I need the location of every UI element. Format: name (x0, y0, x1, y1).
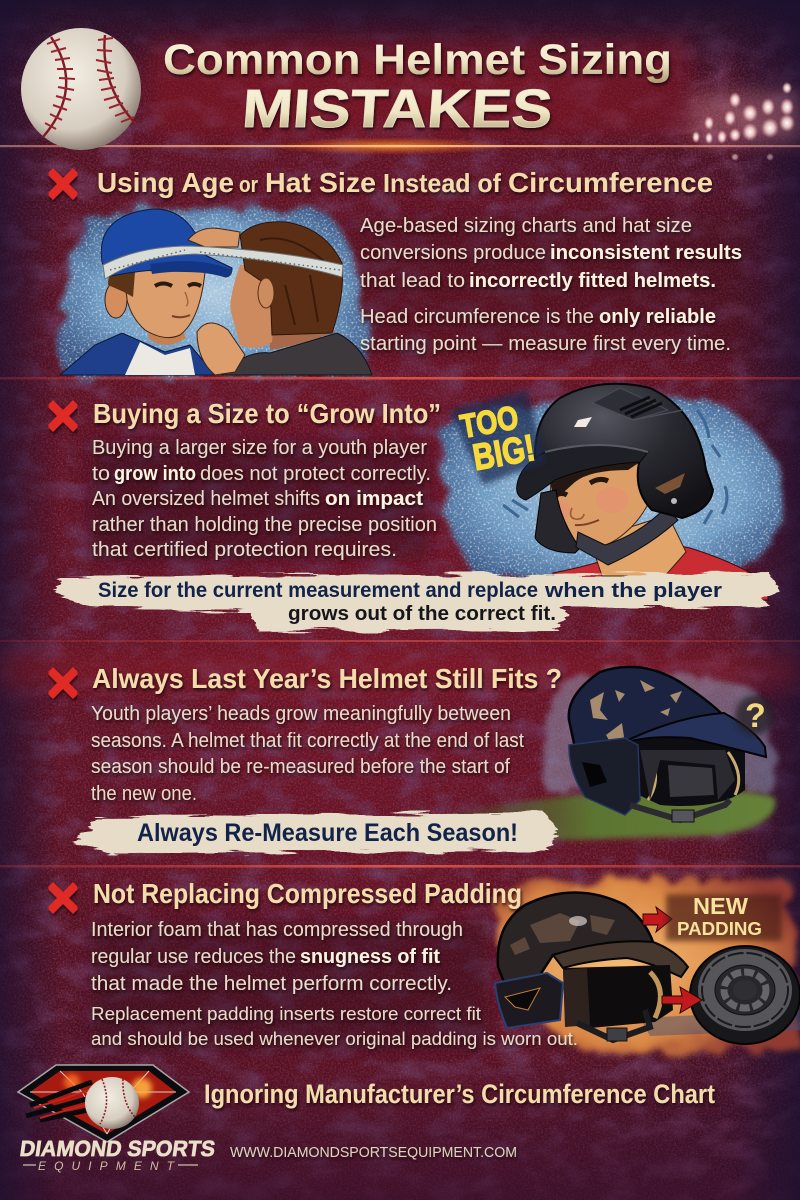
callout banner (72, 813, 558, 853)
stadium lights (690, 82, 800, 161)
body text: Interior foam that has compressed through (91, 919, 463, 941)
divider: mistake 3 (0, 865, 800, 868)
illustration: compressed padding (495, 878, 800, 1056)
website: WWW.DIAMONDSPORTSEQUIPMENT.COM (230, 1144, 517, 1161)
icon: question mark (735, 695, 775, 735)
icon: red x (50, 171, 76, 197)
title (163, 36, 672, 139)
callout banner: when the player (544, 580, 722, 602)
divider: mistake 1 (0, 377, 800, 380)
callout: too big (449, 389, 547, 489)
heading: Instead of (383, 168, 501, 198)
heading: Circumference (508, 167, 713, 198)
body text: Buying a larger size for a youth player (92, 437, 427, 459)
body text: regular use reduces the (91, 946, 296, 968)
body text (91, 703, 524, 805)
icon: red x (50, 885, 76, 911)
body text: that made the helmet perform correctly. (91, 973, 452, 995)
logo wordmark (18, 1136, 217, 1173)
callout: new padding: PADDING (677, 919, 762, 939)
logo wordmark: DIAMOND SPORTS (18, 1136, 217, 1161)
callout: too big: TOO (457, 398, 521, 445)
body text: that lead to (360, 270, 465, 292)
body text: Age-based sizing charts and hat size (360, 215, 692, 237)
body text: grow into (114, 463, 196, 485)
body text: does not protect correctly. (200, 463, 431, 485)
callout: new padding: NEW (693, 893, 748, 919)
icon: baseball (21, 28, 141, 150)
panel: mistake 2 (50, 384, 785, 631)
body text: An oversized helmet shifts (92, 488, 320, 510)
body text: and should be used whenever original padding is worn out. (91, 1029, 578, 1049)
body text (91, 919, 578, 1049)
icon: question mark: ? (745, 697, 766, 735)
body text: incorrectly fitted helmets. (469, 270, 716, 292)
body text: rather than holding the precise position (92, 514, 437, 536)
body text: on impact (325, 488, 423, 510)
icon: red x (50, 403, 76, 429)
panel: mistake 4 (50, 878, 800, 1056)
heading: Not Replacing Compressed Padding (93, 878, 522, 909)
body text: to (92, 463, 110, 485)
callout banner (55, 573, 778, 631)
illustration: worn helmet on grass (445, 667, 775, 840)
callout banner: grows out of the correct fit. (288, 603, 556, 625)
callout banner: Size for the current measurement and replace (98, 579, 538, 602)
illustration: oversized helmet (442, 384, 785, 600)
body text (92, 437, 437, 561)
panel: mistake 1 (50, 167, 742, 375)
body text (360, 215, 742, 355)
body text: inconsistent results (550, 242, 742, 264)
title: MISTAKES (240, 79, 554, 139)
body text: Youth players’ heads grow meaningfully between (91, 703, 511, 725)
logo wordmark: EQUIPMENT (38, 1159, 176, 1173)
footer heading: Ignoring Manufacturer’s Circumference Chart (204, 1079, 715, 1109)
heading: Buying a Size to “Grow Into” (93, 398, 441, 429)
padding disc (690, 946, 800, 1044)
callout: too big: BIG! (470, 427, 538, 478)
divider: mistake 2 (0, 640, 800, 642)
body text: only reliable (599, 306, 716, 328)
panel: header (21, 28, 672, 150)
heading: Always Last Year’s Helmet Still Fits ? (92, 663, 562, 694)
body text: snugness of fit (300, 946, 440, 968)
icon: red x (50, 670, 76, 696)
illustration: measuring head (60, 208, 372, 375)
heading: or (239, 172, 258, 197)
body text: conversions produce (360, 242, 546, 264)
body text: the new one. (91, 783, 197, 805)
body text: Head circumference is the (360, 306, 594, 328)
footer (18, 1065, 715, 1173)
panel: mistake 3 (50, 663, 775, 853)
body text: seasons. A helmet that fit correctly at the end of last (91, 730, 524, 752)
callout: new padding (666, 893, 782, 941)
body text: Replacement padding inserts restore correct fit (91, 1004, 481, 1024)
body text: that certified protection requires. (92, 539, 397, 561)
divider: header (0, 137, 800, 155)
body text: season should be re-measured before the start of (91, 756, 510, 778)
heading: Hat Size (265, 167, 376, 198)
body text: starting point — measure first every time. (360, 333, 731, 355)
heading (97, 167, 713, 198)
heading: Using Age (97, 167, 234, 198)
logo: diamond sports (18, 1065, 217, 1173)
callout banner: Always Re-Measure Each Season! (137, 819, 518, 847)
arrows (643, 907, 702, 1013)
title: Common Helmet Sizing (163, 36, 672, 84)
